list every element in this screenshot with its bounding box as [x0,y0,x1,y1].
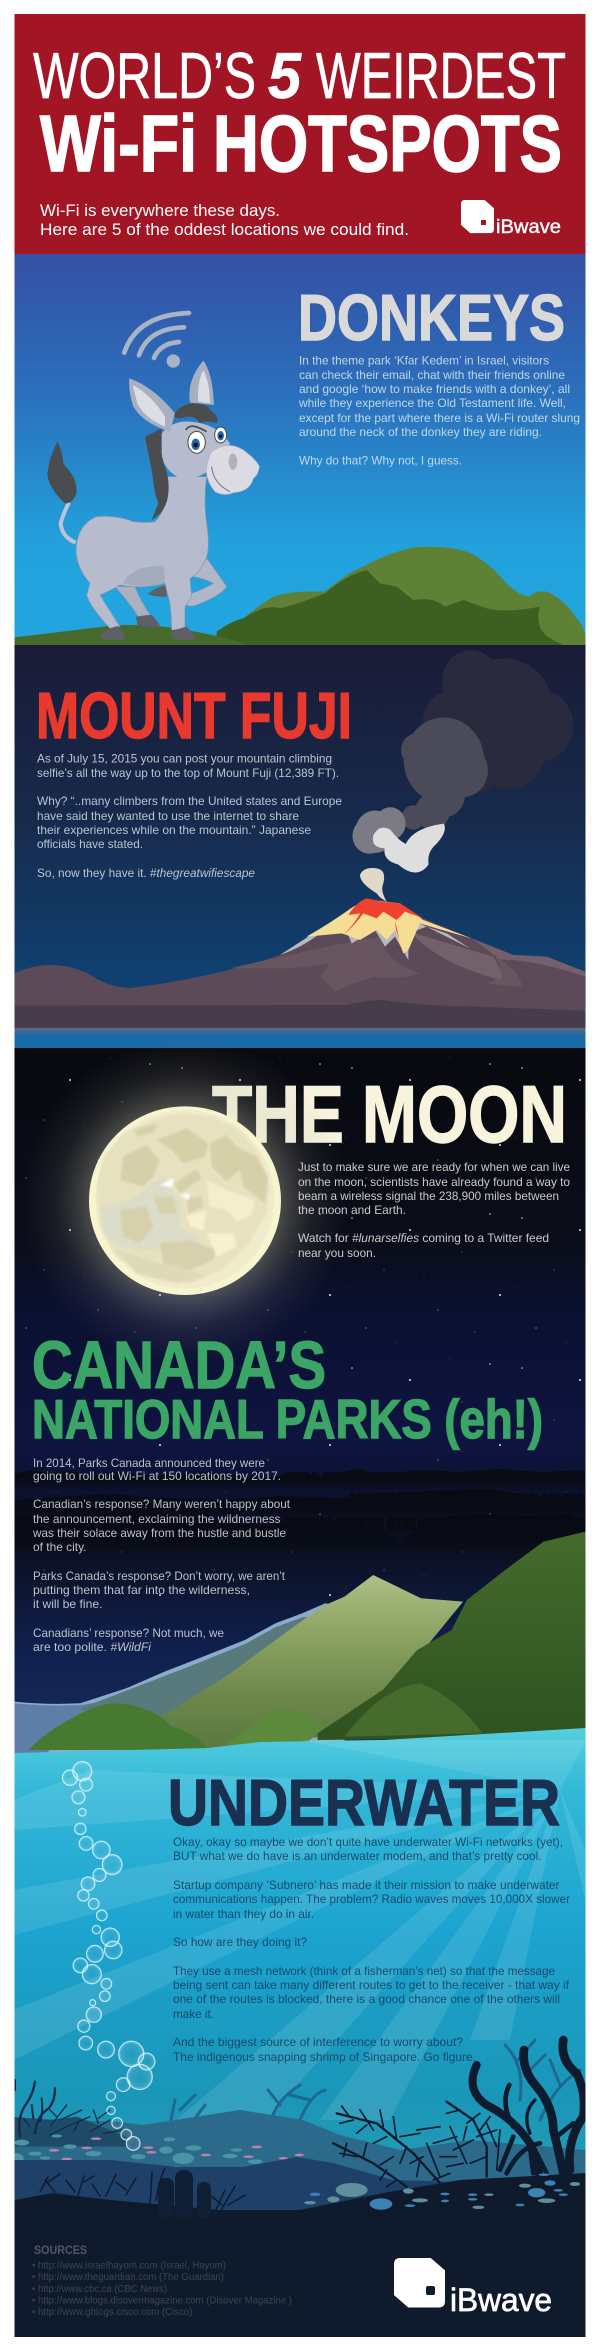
title line one: WORLD’S [33,39,256,112]
text: canada: Parks Canada’s response? Don’t worry, we aren’t [33,1569,286,1583]
text: mount fuji: So, now they have it. #thegreatwifiescape [37,866,255,880]
sources: SOURCES [34,2243,87,2257]
logo: iBwave footer [394,2258,552,2318]
sources: • http://www.gblogs.cisco.com (Cisco) [32,2307,192,2318]
icon: wifi signal [124,313,189,368]
panel: underwater [6,1728,586,2337]
text: donkeys: around the neck of the donkey they are riding. [299,425,542,439]
title line two: Wi-Fi [40,99,197,188]
reef: fish shoal [14,2134,304,2167]
panel: donkeys [14,254,587,646]
intro text: Wi-Fi is everywhere these days. [40,201,280,220]
treeline silhouettes [14,1469,585,1556]
text: underwater: in water than they do in air. [173,1907,314,1921]
text: underwater: being sent can take many different routes to get to the receiver - that way if [173,1978,570,1992]
text: donkeys: can check their email, chat with their friends online [299,368,565,382]
text: underwater: The indigenous snapping shrimp of Singapore. Go figure. [173,2050,476,2064]
text: underwater: Startup company ‘Subnero’ has made it their mission to make underwater [173,1878,560,1892]
text: underwater: Okay, okay so maybe we don’t quite have underwater Wi-Fi networks (yet), [173,1835,563,1849]
lake strip [14,1028,586,1048]
text: mount fuji: have said they wanted to use the internet to share [37,809,299,823]
text: canada: putting them that far into the wilderness, [33,1583,250,1597]
sources: • http://www.blogs.disovermagazine.com (Disover Magazine ) [32,2296,292,2306]
text: donkeys: In the theme park ‘Kfar Kedem’ in Israel, visitors [299,354,549,368]
logo: iBwave header [461,200,560,234]
title line two [39,112,560,173]
text: the moon: Watch for #lunarselfies coming to a Twitter feed [298,1231,549,1245]
text: canada: it will be fine. [33,1597,102,1611]
text: mount fuji: officials have stated. [37,837,143,851]
reef: front silhouette [14,2173,586,2337]
text: underwater: They use a mesh network (think of a fisherman’s net) so that the message [173,1964,555,1978]
text: donkeys: and google ‘how to make friends with a donkey’, all [299,382,570,396]
reef: fish shoal foreground [304,2183,368,2206]
bubbles [62,1762,155,2150]
text: mount fuji: their experiences while on the mountain.” Japanese [37,823,311,837]
reef: low coral silhouettes [40,2168,245,2212]
text: underwater: So how are they doing it? [173,1935,307,1949]
text: the moon: beam a wireless signal the 238,900 miles between [298,1189,559,1203]
text: underwater: one of the routes is blocked, there is a good chance one of the others will [173,1992,560,2006]
smoke: dark plume [423,650,573,793]
heading: mount fuji: MOUNT FUJI [36,679,352,752]
light rays [14,1740,586,2160]
text: canada: are too polite. #WildFi [33,1640,151,1654]
text: canada: going to roll out Wi-Fi at 150 locations by 2017. [33,1469,281,1483]
illustration: volcano [15,868,585,1028]
text: canada: Canadian’s response? Many weren’t happy about [33,1497,291,1511]
reef: back coral [170,2040,580,2125]
text: the moon: the moon and Earth. [298,1203,406,1217]
sources: • http://www.cbc.ca (CBC News) [32,2284,167,2295]
panel: footer [32,2243,552,2318]
text: underwater: BUT what we do have is an underwater modem, and that’s pretty cool. [173,1849,542,1863]
text: canada: the announcement, exclaiming the wildnerness [33,1512,280,1526]
text: underwater: make it. [173,2007,214,2021]
text: mount fuji: As of July 15, 2015 you can post your mountain climbing [37,752,332,766]
text: canada: was their solace away from the hustle and bustle [32,1526,286,1540]
panel: moon and parks sky [14,1036,586,1760]
sources: • http://www.theguardian.com (The Guardian) [32,2272,224,2283]
text: underwater: And the biggest source of interference to worry about? [173,2035,463,2049]
text: canada: of the city. [33,1540,86,1554]
text: canada: In 2014, Parks Canada announced they were [33,1456,265,1470]
text: donkeys: while they experience the Old Testament life. Well, [298,396,566,410]
panel: header [14,14,586,254]
illustration: canadian mountains [15,1532,586,1757]
intro text [40,204,408,235]
text: underwater [173,1835,570,2064]
illustration: moon [89,1106,281,1295]
text: donkeys: Why do that? Why not, I guess. [299,454,462,468]
reef: middle layer [14,2157,450,2210]
title line one: 5 [268,39,302,112]
text: mount fuji [37,752,342,880]
sources [32,2243,292,2318]
reef: left dark coral [10,2080,127,2147]
text: mount fuji: Why? “..many climbers from the United states and Europe [37,794,342,808]
smoke: grey plume [352,718,488,873]
heading: canada's national parks [32,1328,543,1450]
text: the moon [298,1160,570,1260]
text: canada: Canadians’ response? Not much, we [33,1626,224,1640]
logo: iBwave header: iBwave [496,217,561,238]
title line one [32,52,566,99]
reef: stone pillars [158,2170,211,2218]
heading: canada's national parks: CANADA’S [32,1328,326,1403]
panel: mount fuji [14,645,586,1048]
text: the moon: Just to make sure we are ready for when we can live [298,1160,570,1174]
text: donkeys [298,354,580,468]
moon glow [38,1054,332,1348]
illustration: donkey [15,313,259,646]
text: donkeys: except for the part where there is a Wi-Fi router slung [299,411,580,425]
reef: far layer [14,2110,586,2182]
text: the moon: near you soon. [298,1246,376,1260]
text: the moon: on the moon, scientists have already found a way to [298,1175,570,1189]
intro text: Here are 5 of the oddest locations we could find. [40,220,409,239]
reef: right kelp and coral [333,2040,584,2210]
text: mount fuji: selfie’s all the way up to the top of Mount Fuji (12,389 FT). [37,766,339,780]
text: canada [32,1456,291,1654]
sources: • http://www.israelhayom.com (Israel, Hayom) [32,2260,226,2272]
text: underwater: communications happen. The problem? Radio waves moves 10,000X slower [173,1892,570,1906]
hill [217,547,587,645]
logo: iBwave footer: iBwave [450,2282,552,2318]
